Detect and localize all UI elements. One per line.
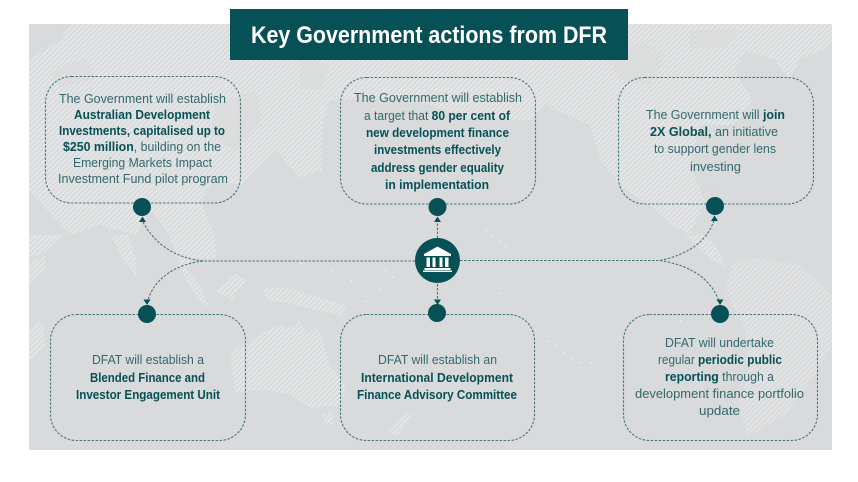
title banner	[230, 9, 628, 60]
panel: periodic public reporting: reporting through a	[665, 370, 774, 384]
panel: periodic public reporting: update	[699, 404, 740, 418]
panel: 80 per cent gender equality target: a target that 80 per cent of	[364, 109, 511, 123]
plain ocean east of the northern land	[700, 45, 832, 235]
panel: join 2X Global: investing	[690, 160, 741, 174]
panel: periodic public reporting	[624, 314, 818, 440]
panel: 80 per cent gender equality target: new development finance	[366, 126, 509, 140]
panel: periodic public reporting: regular periodic public	[658, 353, 782, 367]
panel: International Development Finance Advisory Committee: Finance Advisory Committee	[357, 388, 517, 402]
icon: central government building	[415, 238, 460, 283]
Eurasia and Africa	[29, 24, 832, 255]
panel: 80 per cent gender equality target	[340, 78, 536, 204]
soft plain patches inside northern land	[29, 24, 740, 150]
panel: join 2X Global	[618, 78, 814, 204]
panel: International Development Finance Advisory Committee	[340, 314, 534, 440]
panel: join 2X Global: to support gender lens	[654, 142, 776, 156]
Africa fragments	[29, 235, 62, 362]
panel: join 2X Global: 2X Global, an initiative	[650, 125, 778, 139]
panel: Blended Finance and Investor Engagement Unit: DFAT will establish a	[92, 353, 204, 367]
panel: Australian Development Investments: Emerging Markets Impact	[73, 156, 213, 170]
panel: 80 per cent gender equality target: investments effectively	[374, 143, 501, 157]
panel: Australian Development Investments: The Government will establish	[59, 92, 226, 106]
panel: Blended Finance and Investor Engagement Unit: Blended Finance and	[90, 371, 205, 385]
panel: periodic public reporting: development finance portfolio	[635, 387, 804, 401]
panel: Australian Development Investments: Investment Fund pilot program	[58, 172, 228, 186]
New Zealand and Tasmania	[322, 412, 413, 436]
panel: 80 per cent gender equality target: The Government will establish	[354, 91, 522, 105]
panel: 80 per cent gender equality target: in implementation	[385, 178, 489, 192]
panel: International Development Finance Advisory Committee: International Development	[361, 371, 514, 385]
Central America	[685, 235, 725, 268]
panel: Australian Development Investments: $250 million, building on the	[63, 140, 221, 154]
South-East Asia	[169, 235, 216, 308]
panel: Australian Development Investments: Australian Development	[74, 108, 211, 122]
connector lines from central hub	[143, 220, 719, 301]
Indonesia	[216, 274, 346, 316]
panel: 80 per cent gender equality target: address gender equality	[371, 161, 504, 175]
panel: periodic public reporting: DFAT will undertake	[665, 336, 774, 350]
panel: Australian Development Investments: Investments, capitalised up to	[59, 124, 225, 138]
arrow heads	[139, 216, 724, 305]
title banner: Key Government actions from DFR	[251, 22, 607, 49]
connector dots	[133, 197, 729, 323]
scattered island dots	[300, 230, 702, 364]
panel: Blended Finance and Investor Engagement Unit	[50, 314, 246, 440]
panel: Australian Development Investments	[46, 76, 240, 203]
panel: Blended Finance and Investor Engagement Unit: Investor Engagement Unit	[76, 388, 221, 402]
Australia	[229, 322, 346, 408]
panel: join 2X Global: The Government will join	[646, 108, 785, 122]
India	[111, 235, 137, 276]
South America	[725, 258, 832, 437]
panel: International Development Finance Advisory Committee: DFAT will establish an	[378, 353, 497, 367]
